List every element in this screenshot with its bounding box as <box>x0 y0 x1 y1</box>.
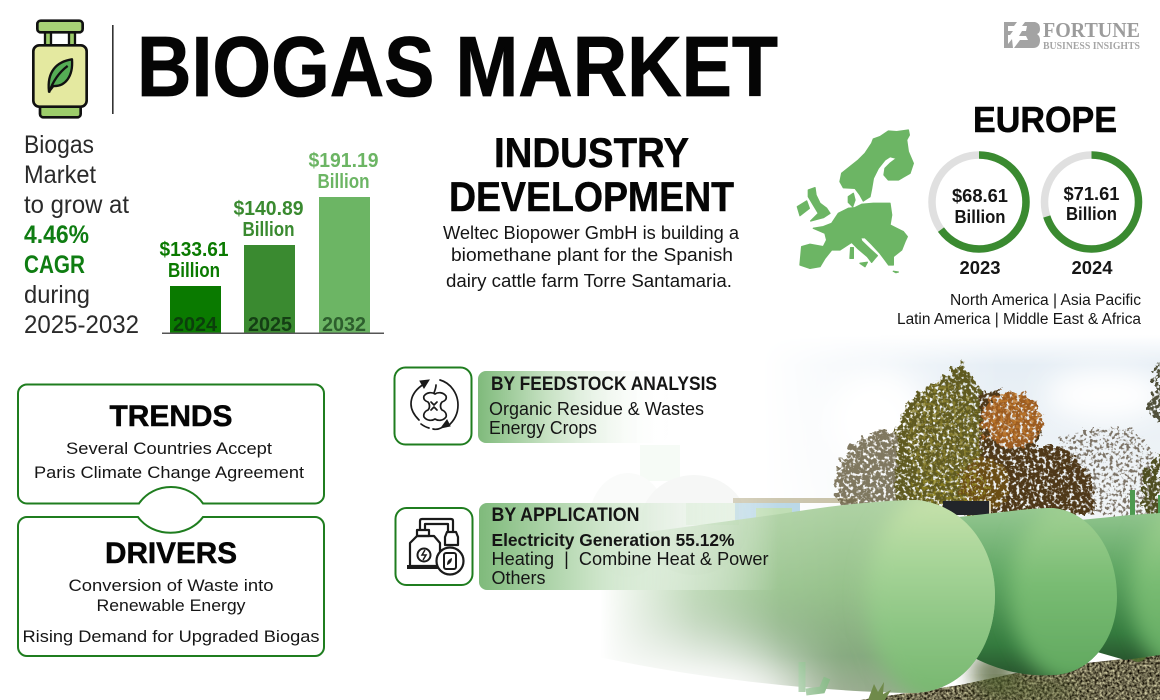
text: industry development description: biomethane plant for the Spanish <box>451 245 733 265</box>
text: industry development description <box>443 223 740 291</box>
donut: Europe 2024: Billion <box>1066 204 1117 224</box>
tank 3 <box>1083 513 1160 660</box>
bar 2032: $191.19 <box>308 150 378 172</box>
pale bare trees on the right <box>1060 428 1155 515</box>
photo: green biogas storage tanks with trees <box>612 345 1160 700</box>
bar 2024: 2024 <box>173 314 218 336</box>
segment band: by application: Electricity Generation 55.12% <box>492 530 735 550</box>
panel: trends: TRENDS <box>110 400 232 433</box>
text: other regions: Latin America | Middle East & Africa <box>897 311 1141 328</box>
icon: biogas plant with cylinder <box>396 508 472 585</box>
title divider <box>112 25 114 114</box>
bar 2025: Billion <box>242 219 294 241</box>
panel: drivers: Conversion of Waste into <box>68 576 274 595</box>
segment band: by application <box>479 503 779 590</box>
segment band: by feedstock analysis: Organic Residue & Wastes <box>489 399 704 419</box>
CAGR text block: Biogas <box>24 131 94 159</box>
segment band: by application: BY APPLICATION <box>492 505 640 526</box>
donut: Europe 2024 <box>1044 155 1138 278</box>
logo: Fortune Business Insights: FORTUNE <box>1043 18 1140 42</box>
heading: industry development: INDUSTRY <box>494 129 689 176</box>
CAGR text block: during <box>24 281 90 309</box>
donut: Europe 2024: $71.61 <box>1064 184 1120 204</box>
icon: gas cylinder with leaf <box>33 21 87 117</box>
CAGR text block: 2025-2032 <box>24 311 139 339</box>
text: other regions <box>897 292 1141 328</box>
segment band: by feedstock analysis <box>478 371 717 443</box>
black sign box <box>943 490 1160 515</box>
bar chart: market size <box>160 150 384 336</box>
bar 2032: Billion <box>318 171 370 193</box>
panel: drivers: Renewable Energy <box>96 596 246 615</box>
logo: Fortune Business Insights: BUSINESS INSIGHTS <box>1043 40 1140 52</box>
donut: Europe 2023 <box>932 155 1026 278</box>
title: BIOGAS MARKET <box>137 20 778 115</box>
panel: drivers <box>18 517 324 656</box>
segment band: by feedstock analysis: BY FEEDSTOCK ANALYSIS <box>491 374 717 395</box>
leaf highlights <box>909 380 1038 508</box>
bar 2025: $140.89 <box>234 198 304 220</box>
bar 2024: $133.61 <box>160 239 228 261</box>
text: other regions: North America | Asia Pacific <box>950 292 1141 309</box>
bar 2032 <box>308 150 378 336</box>
donut: Europe 2023: 2023 <box>960 258 1000 278</box>
CAGR text block: 4.46% <box>24 221 89 249</box>
panel: trends <box>18 384 324 504</box>
weeds at tank 1 foot <box>868 682 891 700</box>
bar 2024 <box>160 239 228 336</box>
donut: Europe 2024: 2024 <box>1072 258 1112 278</box>
segment band: by application: Heating | Combine Heat & Power <box>492 549 769 569</box>
CAGR text block: Market <box>24 161 96 189</box>
tank 2 <box>959 508 1117 676</box>
panel: trends: Several Countries Accept <box>66 439 272 458</box>
icon: apple core recycling <box>394 368 472 444</box>
panel: drivers: Rising Demand for Upgraded Biogas <box>22 627 320 646</box>
distant plant structures <box>733 498 858 521</box>
bar 2032: 2032 <box>322 314 366 336</box>
CAGR text block <box>24 131 139 339</box>
heading: industry development <box>449 129 734 220</box>
bar 2025: 2025 <box>248 314 292 336</box>
region heading: Europe: EUROPE <box>973 99 1117 140</box>
panel: drivers: DRIVERS <box>105 537 237 570</box>
CAGR text block: to grow at <box>24 191 129 219</box>
donut: Europe 2023: $68.61 <box>952 186 1008 206</box>
map: Europe <box>797 130 913 273</box>
donut: Europe 2023: Billion <box>954 207 1006 227</box>
panel: trends: Paris Climate Change Agreement <box>34 463 304 482</box>
main tree mass <box>833 362 1160 515</box>
tank support leg <box>802 662 827 692</box>
faded background domes <box>588 445 748 577</box>
text: industry development description: dairy cattle farm Torre Santamaria. <box>446 271 732 291</box>
ground <box>860 655 1160 700</box>
logo: Fortune Business Insights <box>1004 18 1140 52</box>
segment band: by feedstock analysis: Energy Crops <box>489 418 597 438</box>
sky <box>874 345 1160 520</box>
heading: industry development: DEVELOPMENT <box>449 173 734 220</box>
text: industry development description: Weltec Biopower GmbH is building a <box>443 223 740 243</box>
CAGR text block: CAGR <box>24 251 85 279</box>
segment band: by application: Others <box>492 568 546 588</box>
bar 2025 <box>234 198 304 336</box>
bar 2024: Billion <box>168 260 220 282</box>
tank 1 <box>612 500 995 693</box>
